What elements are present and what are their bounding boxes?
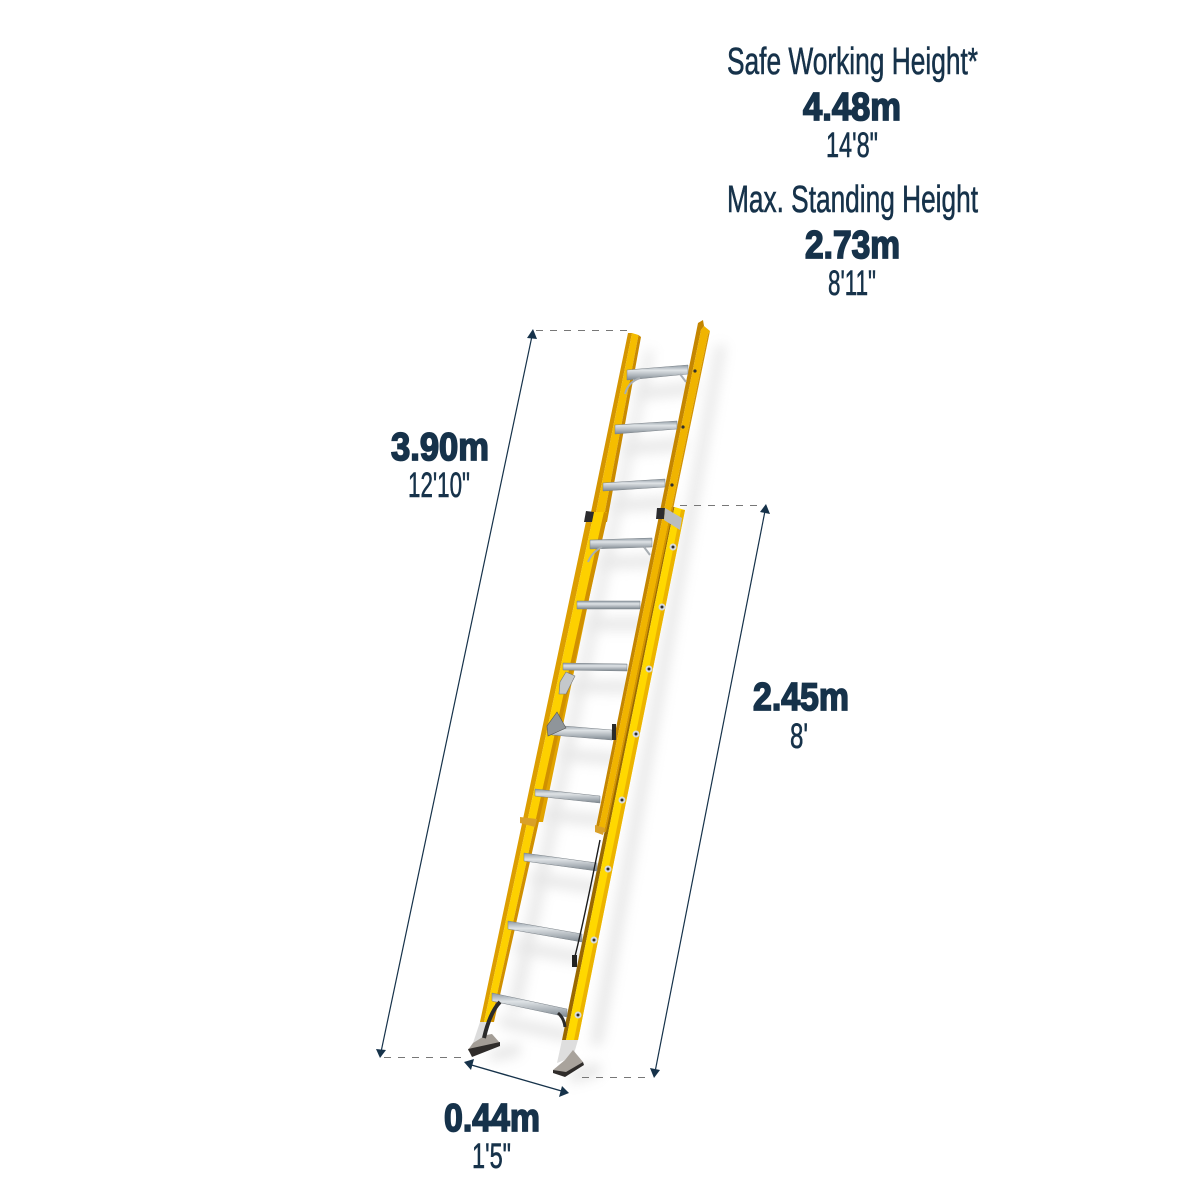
- base section right rail: [562, 507, 685, 1040]
- fly section right rail: [595, 320, 710, 832]
- heading: safe working height: 4.48m: [803, 86, 901, 129]
- ladder: [468, 320, 710, 1077]
- dimension: overall length 3.90m: 12'10": [408, 466, 470, 505]
- fly rail end blocks: [520, 817, 605, 835]
- heading: safe working height: 14'8": [826, 126, 878, 165]
- heading: max standing height: 8'11": [828, 264, 876, 303]
- dimension: width 0.44m: 1'5": [472, 1137, 511, 1176]
- dimension: overall length 3.90m: [376, 329, 634, 1058]
- dimension: closed length 2.45m: [582, 504, 849, 1078]
- heading: max standing height: [727, 179, 978, 303]
- heading: max standing height: Max. Standing Height: [727, 179, 978, 221]
- foot: left: [468, 1002, 500, 1057]
- rungs: [492, 365, 688, 1017]
- rivets: [576, 544, 676, 1018]
- slide guides: [584, 508, 682, 530]
- base section left rail: [480, 512, 608, 1022]
- pulley and rope lock: [547, 672, 616, 740]
- rope hook: [572, 955, 577, 967]
- heading: safe working height: [727, 41, 978, 165]
- ladder shadow: [490, 345, 726, 1084]
- dimension: width 0.44m: [444, 1059, 569, 1176]
- heading: safe working height: Safe Working Height*: [727, 41, 978, 83]
- rung braces: [588, 374, 686, 562]
- dimension: closed length 2.45m: 2.45m: [753, 676, 849, 719]
- heading: max standing height: 2.73m: [805, 224, 900, 267]
- dimension: closed length 2.45m: 8': [790, 717, 808, 756]
- rope: [574, 840, 600, 960]
- fly section left rail: [534, 333, 641, 822]
- dimension: overall length 3.90m: 3.90m: [391, 426, 489, 469]
- dimension: width 0.44m: 0.44m: [444, 1097, 540, 1140]
- foot: right: [553, 1013, 584, 1077]
